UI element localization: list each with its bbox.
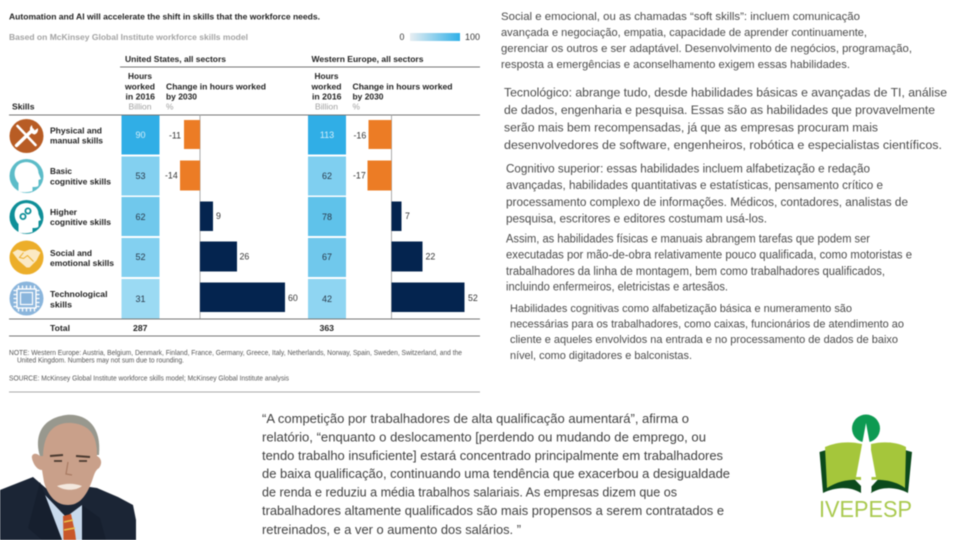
heat column: Europe hours 2016: 113 bbox=[320, 130, 334, 140]
footnote: United Kingdom. Numbers may not sum due to rounding. bbox=[17, 358, 184, 364]
logo: IVEPESP bbox=[819, 414, 912, 522]
total row bbox=[9, 318, 480, 336]
text block: physical and manual: Assim, as habilidades físicas e manuais abrangem tarefas que podem ser bbox=[506, 234, 870, 246]
quote text: de renda e reduziu a média trabalhos salariais. As empresas dizem que os bbox=[262, 484, 677, 500]
label: social skills: Social and bbox=[50, 248, 92, 258]
text block: social and emotional bbox=[501, 11, 912, 71]
table header: Change in hours worked bbox=[352, 82, 452, 92]
bar chart: US change by 2030: -14 bbox=[165, 170, 178, 180]
bar chart: Europe change by 2030: 7 bbox=[405, 211, 410, 221]
text block: social and emotional: resposta a emergências e aconselhamento exigem essas habilidades. bbox=[501, 59, 850, 71]
heat column: Europe hours 2016: 67 bbox=[322, 252, 332, 262]
table header: Skills bbox=[12, 102, 35, 112]
text block: higher cognitive: processamento complexo de informações. Médicos, contadores, analistas de bbox=[506, 197, 908, 209]
table header: in 2016 bbox=[126, 92, 155, 102]
footnote bbox=[9, 350, 462, 382]
text block: higher cognitive bbox=[506, 164, 908, 226]
chart subtitle: Based on McKinsey Global Institute workforce skills model bbox=[9, 32, 248, 42]
label: higher cognitive skills bbox=[50, 207, 111, 227]
table header: worked bbox=[124, 82, 155, 92]
table header bbox=[9, 54, 480, 116]
text block: technological: de dados, engenharia e pesquisa. Essas são as habilidades que provavelmente bbox=[504, 103, 935, 117]
icon: microchip bbox=[10, 282, 44, 316]
label: physical skills bbox=[50, 126, 103, 146]
bar chart: US change by 2030: 60 bbox=[288, 293, 298, 303]
text block: basic cognitive: cliente e aqueles envolvidos na entrada e no processamento de dados de baixo bbox=[510, 334, 898, 346]
icon: head bbox=[10, 159, 44, 193]
label: basic cognitive skills: cognitive skills bbox=[50, 176, 111, 186]
quote text: de baixa qualificação, continuando uma tendência que exacerbou a desigualdade bbox=[262, 466, 730, 481]
text block: basic cognitive bbox=[510, 303, 904, 362]
bar chart: US change by 2030: -11 bbox=[169, 130, 181, 140]
heat column: US hours 2016: 62 bbox=[135, 212, 146, 222]
label: higher cognitive skills: cognitive skills bbox=[50, 217, 111, 227]
colour legend: 100 bbox=[465, 32, 480, 42]
text block: physical and manual bbox=[506, 234, 912, 294]
footnote: NOTE: Western Europe: Austria, Belgium, Denmark, Finland, France, Germany, Greece, Italy, Netherlands, Norway, Spain, Sweden, Switzerland, and the bbox=[9, 350, 462, 357]
text block: basic cognitive: nível, como digitadores e balconistas. bbox=[510, 350, 692, 362]
quote text: trabalhadores altamente qualificados são mais propensos a serem contratados e bbox=[262, 503, 724, 518]
label: technological skills bbox=[50, 289, 108, 310]
text block: basic cognitive: Habilidades cognitivas como alfabetização básica e numeramento são bbox=[510, 303, 852, 315]
text block: social and emotional: Social e emocional, ou as chamadas “soft skills”: incluem comunicação bbox=[501, 11, 860, 23]
table header: United States, all sectors bbox=[125, 54, 226, 64]
text block: technological: serão mais bem recompensadas, já que as empresas procuram mais bbox=[504, 120, 878, 134]
heat column: US hours 2016: 31 bbox=[135, 294, 146, 304]
colour legend bbox=[400, 32, 480, 42]
bar chart: US change by 2030: 9 bbox=[216, 211, 221, 221]
heat column: Europe hours 2016: 78 bbox=[322, 212, 332, 222]
table header: Billion bbox=[128, 102, 152, 112]
text block: higher cognitive: avançadas, habilidades quantitativas e estatísticas, pensamento crítico e bbox=[506, 180, 883, 192]
heat column: Europe hours 2016 bbox=[308, 116, 346, 318]
label: basic cognitive skills: Basic bbox=[50, 166, 72, 176]
quote text: tendo trabalho insuficiente] estará concentrado principalmente em trabalhadores bbox=[262, 448, 723, 463]
total row: 363 bbox=[320, 323, 334, 333]
table header: by 2030 bbox=[166, 92, 197, 102]
table header: Billion bbox=[315, 102, 338, 112]
label: technological skills: skills bbox=[50, 300, 72, 310]
bar chart: US change by 2030 bbox=[165, 115, 298, 319]
table header: by 2030 bbox=[352, 92, 384, 102]
table header: Western Europe, all sectors bbox=[312, 54, 424, 64]
panel: skills chart bbox=[9, 12, 480, 392]
bar chart: Europe change by 2030: -17 bbox=[353, 170, 366, 180]
text block: technological bbox=[504, 86, 947, 152]
table header: Hours bbox=[128, 71, 152, 81]
label: higher cognitive skills: Higher bbox=[50, 207, 78, 217]
table header: Hours bbox=[314, 71, 339, 81]
label: social skills bbox=[50, 248, 114, 268]
label: social skills: emotional skills bbox=[50, 258, 114, 268]
table header: Change in hours worked bbox=[166, 82, 266, 92]
label: physical skills: Physical and bbox=[50, 126, 102, 136]
text block: social and emotional: gerenciar os outros e ser adaptável. Desenvolvimento de negócios, programação, bbox=[501, 43, 912, 55]
text block: basic cognitive: necessárias para os trabalhadores, como caixas, funcionários de atendimento ao bbox=[510, 318, 904, 330]
heat column: US hours 2016: 53 bbox=[135, 171, 146, 181]
icon: head with gears bbox=[10, 200, 44, 234]
label: physical skills: manual skills bbox=[50, 136, 103, 146]
bar chart: Europe change by 2030 bbox=[353, 115, 478, 319]
heat column: Europe hours 2016: 62 bbox=[322, 171, 332, 181]
bar chart: Europe change by 2030: -16 bbox=[354, 130, 366, 140]
table header: % bbox=[166, 102, 174, 112]
total row: 287 bbox=[133, 323, 148, 333]
table header: worked bbox=[311, 82, 342, 92]
heat column: Europe hours 2016: 42 bbox=[322, 294, 332, 304]
text block: technological: Tecnológico: abrange tudo, desde habilidades básicas e avançadas de TI, análise bbox=[504, 86, 947, 100]
quote text bbox=[262, 411, 730, 537]
label: basic cognitive skills bbox=[50, 166, 111, 186]
heat column: US hours 2016 bbox=[122, 116, 160, 318]
portrait photo bbox=[0, 415, 136, 540]
text block: higher cognitive: pesquisa, escritores e editores costumam usá-los. bbox=[506, 214, 767, 226]
heat column: US hours 2016: 90 bbox=[135, 130, 146, 140]
text block: social and emotional: avançada e negociação, empatia, capacidade de aprender continuamente, bbox=[501, 27, 867, 39]
icon: handshake bbox=[10, 240, 44, 274]
colour legend: 0 bbox=[400, 32, 404, 42]
footnote: SOURCE: McKinsey Global Institute workforce skills model; McKinsey Global Institute analysis bbox=[9, 376, 289, 382]
text block: technological: desenvolvedores de software, engenheiros, robótica e especialistas científicos. bbox=[504, 138, 942, 152]
table header: in 2016 bbox=[312, 92, 342, 102]
text block: physical and manual: executadas por mão-de-obra relativamente pouco qualificada, como motoristas e bbox=[506, 250, 912, 262]
text block: higher cognitive: Cognitivo superior: essas habilidades incluem alfabetização e redação bbox=[506, 164, 870, 176]
table header: % bbox=[352, 102, 360, 112]
logo wordmark: IVEPESP bbox=[819, 496, 912, 522]
bar chart: US change by 2030: 26 bbox=[240, 252, 249, 262]
quote text: “A competição por trabalhadores de alta qualificação aumentará”, afirma o bbox=[262, 411, 689, 426]
heat column: US hours 2016: 52 bbox=[135, 252, 146, 262]
bar chart: Europe change by 2030: 22 bbox=[426, 252, 435, 262]
text block: physical and manual: trabalhadores da linha de montagem, bem como trabalhadores qualificados, bbox=[506, 266, 885, 278]
chart title: Automation and AI will accelerate the shift in skills that the workforce needs. bbox=[9, 12, 320, 22]
quote text: relatório, “enquanto o deslocamento [perdendo ou mudando de emprego, ou bbox=[262, 430, 706, 444]
icon: tools bbox=[10, 119, 44, 153]
bar chart: Europe change by 2030: 52 bbox=[468, 293, 478, 303]
text block: physical and manual: incluindo enfermeiros, eletricistas e artesãos. bbox=[506, 282, 728, 294]
total row: Total bbox=[50, 323, 70, 333]
quote text: retreinados, e a ver o aumento dos salários. ” bbox=[262, 522, 521, 537]
label: technological skills: Technological bbox=[50, 289, 108, 299]
